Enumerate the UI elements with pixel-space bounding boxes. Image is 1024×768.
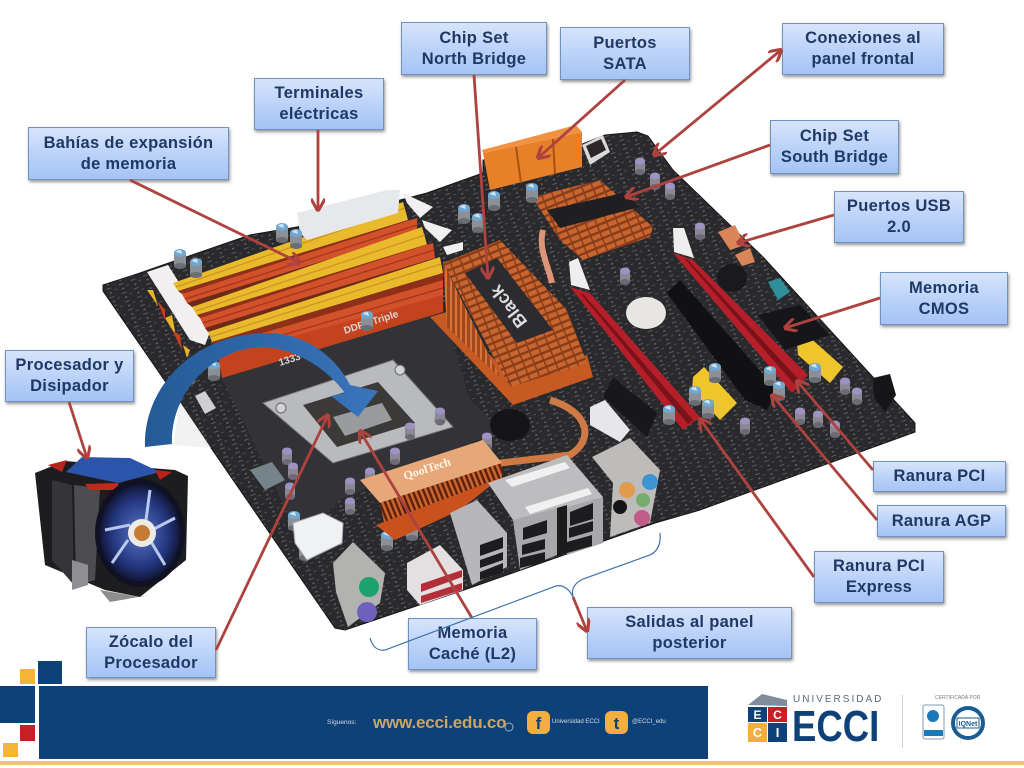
- black jumper: [873, 374, 896, 412]
- label: salidas: Salidas al panel: [625, 613, 754, 631]
- board print: 1333: [278, 351, 303, 369]
- label: CMOS: Memoria: [909, 278, 979, 296]
- motherboard: [103, 125, 915, 630]
- big north bridge heat sink: [430, 240, 593, 405]
- logo squares: I: [776, 725, 779, 740]
- label: PCI express: [814, 551, 944, 603]
- label: memoria: de memoria: [81, 154, 176, 172]
- arrow: conexiones: [654, 50, 781, 155]
- dual LAN block: [488, 455, 603, 570]
- small fan header: [195, 391, 216, 414]
- certified by: CERTIFICADA POR: [935, 695, 980, 701]
- arrow: AGP: [772, 395, 877, 520]
- big north bridge heat sink: Black: [486, 280, 531, 332]
- arrow: memoria: [130, 180, 300, 263]
- left navy piece: [0, 686, 35, 723]
- footer graphics: [0, 661, 1024, 765]
- rear IO ports: [333, 438, 660, 627]
- label: procesador: Procesador y: [15, 356, 124, 374]
- label: zocalo: Zócalo del: [109, 632, 193, 650]
- arrow: PCI express: [700, 419, 814, 577]
- south bridge heat sink: [532, 180, 653, 260]
- fan: [95, 479, 185, 587]
- orange square top: [20, 669, 35, 684]
- blue curved arrow: [145, 333, 378, 447]
- navy square top: [38, 661, 62, 684]
- label: cache: [408, 618, 537, 670]
- label: south bridge: [770, 120, 899, 174]
- gray USB block: [450, 500, 507, 585]
- label: north bridge: Chip Set: [439, 28, 509, 46]
- label: terminales: Terminales: [275, 84, 363, 102]
- cooler top: [66, 457, 160, 483]
- label: north bridge: North Bridge: [422, 50, 526, 68]
- certification badges: IQNet: [959, 721, 978, 728]
- arrow: north bridge: [474, 75, 488, 278]
- label: USB: 2.0: [887, 218, 911, 236]
- label: AGP: [877, 505, 1006, 537]
- divider logo: [902, 695, 903, 748]
- arrow: PCI: [797, 381, 873, 470]
- arrow: zocalo: [216, 415, 328, 650]
- label: memoria: [28, 127, 229, 180]
- white RAM clips: [147, 193, 463, 358]
- arrow: SATA: [538, 80, 625, 158]
- label: north bridge: [401, 22, 547, 75]
- red USB block: [407, 545, 463, 605]
- label: PCI express: Ranura PCI: [833, 557, 925, 575]
- audio block: [592, 438, 660, 537]
- SATA ports: [482, 125, 582, 190]
- label: CMOS: [880, 272, 1008, 325]
- faint watermark: [173, 402, 211, 448]
- orange square bottom: [3, 743, 18, 757]
- label: conexiones: panel frontal: [812, 50, 914, 68]
- label: salidas: [587, 607, 792, 659]
- icon: twitter: t: [614, 714, 620, 733]
- logo squares: E: [753, 708, 762, 722]
- CMOS chip: [758, 305, 830, 350]
- socket area traces: [215, 300, 500, 540]
- certification badges: [923, 705, 983, 739]
- label: PCI express: Express: [846, 578, 912, 596]
- icon: twitter: [605, 711, 628, 734]
- label: SATA: SATA: [603, 54, 647, 72]
- label: south bridge: South Bridge: [781, 148, 888, 166]
- footer texts: Síguenos:: [327, 719, 356, 726]
- PCI Express slots and AGP: [569, 228, 808, 437]
- label: salidas: posterior: [652, 634, 727, 652]
- label: SATA: [560, 27, 690, 80]
- LED display: [582, 135, 610, 165]
- molex connector: [590, 400, 630, 442]
- label: conexiones: [782, 23, 944, 75]
- yellow slots: [692, 335, 843, 420]
- footer facebook text: Universidad ECCI: [552, 719, 600, 725]
- label: USB: Puertos USB: [847, 197, 951, 215]
- label: CMOS: CMOS: [919, 300, 969, 318]
- white power connector: [293, 513, 343, 560]
- icon: facebook: [527, 711, 550, 734]
- label: south bridge: Chip Set: [800, 127, 869, 145]
- socket frame: [263, 360, 453, 463]
- arrow: cache: [360, 431, 472, 618]
- logo squares: C: [753, 725, 763, 740]
- teal header: [768, 278, 790, 300]
- label: PCI: [873, 461, 1006, 492]
- heat pipes: [542, 230, 552, 283]
- arrow: procesador: [69, 402, 87, 458]
- label: USB: [834, 191, 964, 243]
- label: cache: Caché (L2): [429, 645, 516, 663]
- black VRM coil: [490, 409, 530, 441]
- QoolTech heat sink: [360, 440, 502, 540]
- logo squares: C: [773, 708, 782, 722]
- capacitors: [174, 158, 862, 561]
- label: procesador: [5, 350, 134, 402]
- QoolTech heat sink: QoolTech: [402, 454, 453, 483]
- logo squares: [748, 694, 787, 742]
- arrow: CMOS: [785, 298, 880, 328]
- motherboard: DDR3 Triple: [343, 309, 400, 337]
- label: zocalo: Procesador: [104, 654, 198, 672]
- logo ECCI: ECCI: [792, 702, 879, 751]
- label: cache: Memoria: [438, 624, 507, 642]
- label: terminales: [254, 78, 384, 130]
- RAM slots: [173, 202, 443, 378]
- label: terminales: eléctricas: [279, 105, 359, 123]
- arrow: south bridge: [626, 145, 770, 197]
- arrow: salidas: [573, 597, 587, 631]
- label: SATA: Puertos: [593, 34, 657, 52]
- logo universidad: UNIVERSIDAD: [793, 694, 883, 705]
- brace: panel posterior: [370, 533, 660, 650]
- board base: [103, 132, 915, 630]
- red square: [20, 725, 35, 741]
- processor cooler: [35, 457, 188, 602]
- footer website: www.ecci.edu.co: [373, 713, 506, 732]
- copper coils: [718, 225, 745, 250]
- PS/2 block: [333, 542, 385, 627]
- footer twitter text: @ECCI_edu: [632, 719, 666, 725]
- CMOS battery: [626, 297, 666, 329]
- arrow: USB: [738, 215, 834, 243]
- label: AGP: Ranura AGP: [892, 512, 991, 530]
- label: zocalo: [86, 627, 216, 678]
- inductor: [250, 462, 285, 490]
- navy band: [39, 686, 708, 759]
- arrow: terminales: [317, 130, 319, 210]
- ATX power connector: [297, 190, 400, 240]
- label: conexiones: Conexiones al: [805, 29, 921, 47]
- gold line: [0, 761, 1024, 765]
- label: PCI: Ranura PCI: [894, 467, 985, 485]
- icon: facebook: f: [536, 714, 542, 733]
- arrows: [69, 50, 880, 650]
- label: memoria: Bahías de expansión: [44, 134, 213, 152]
- speaker: [717, 264, 747, 292]
- label: procesador: Disipador: [30, 377, 109, 395]
- icon: link cursor: [505, 723, 513, 731]
